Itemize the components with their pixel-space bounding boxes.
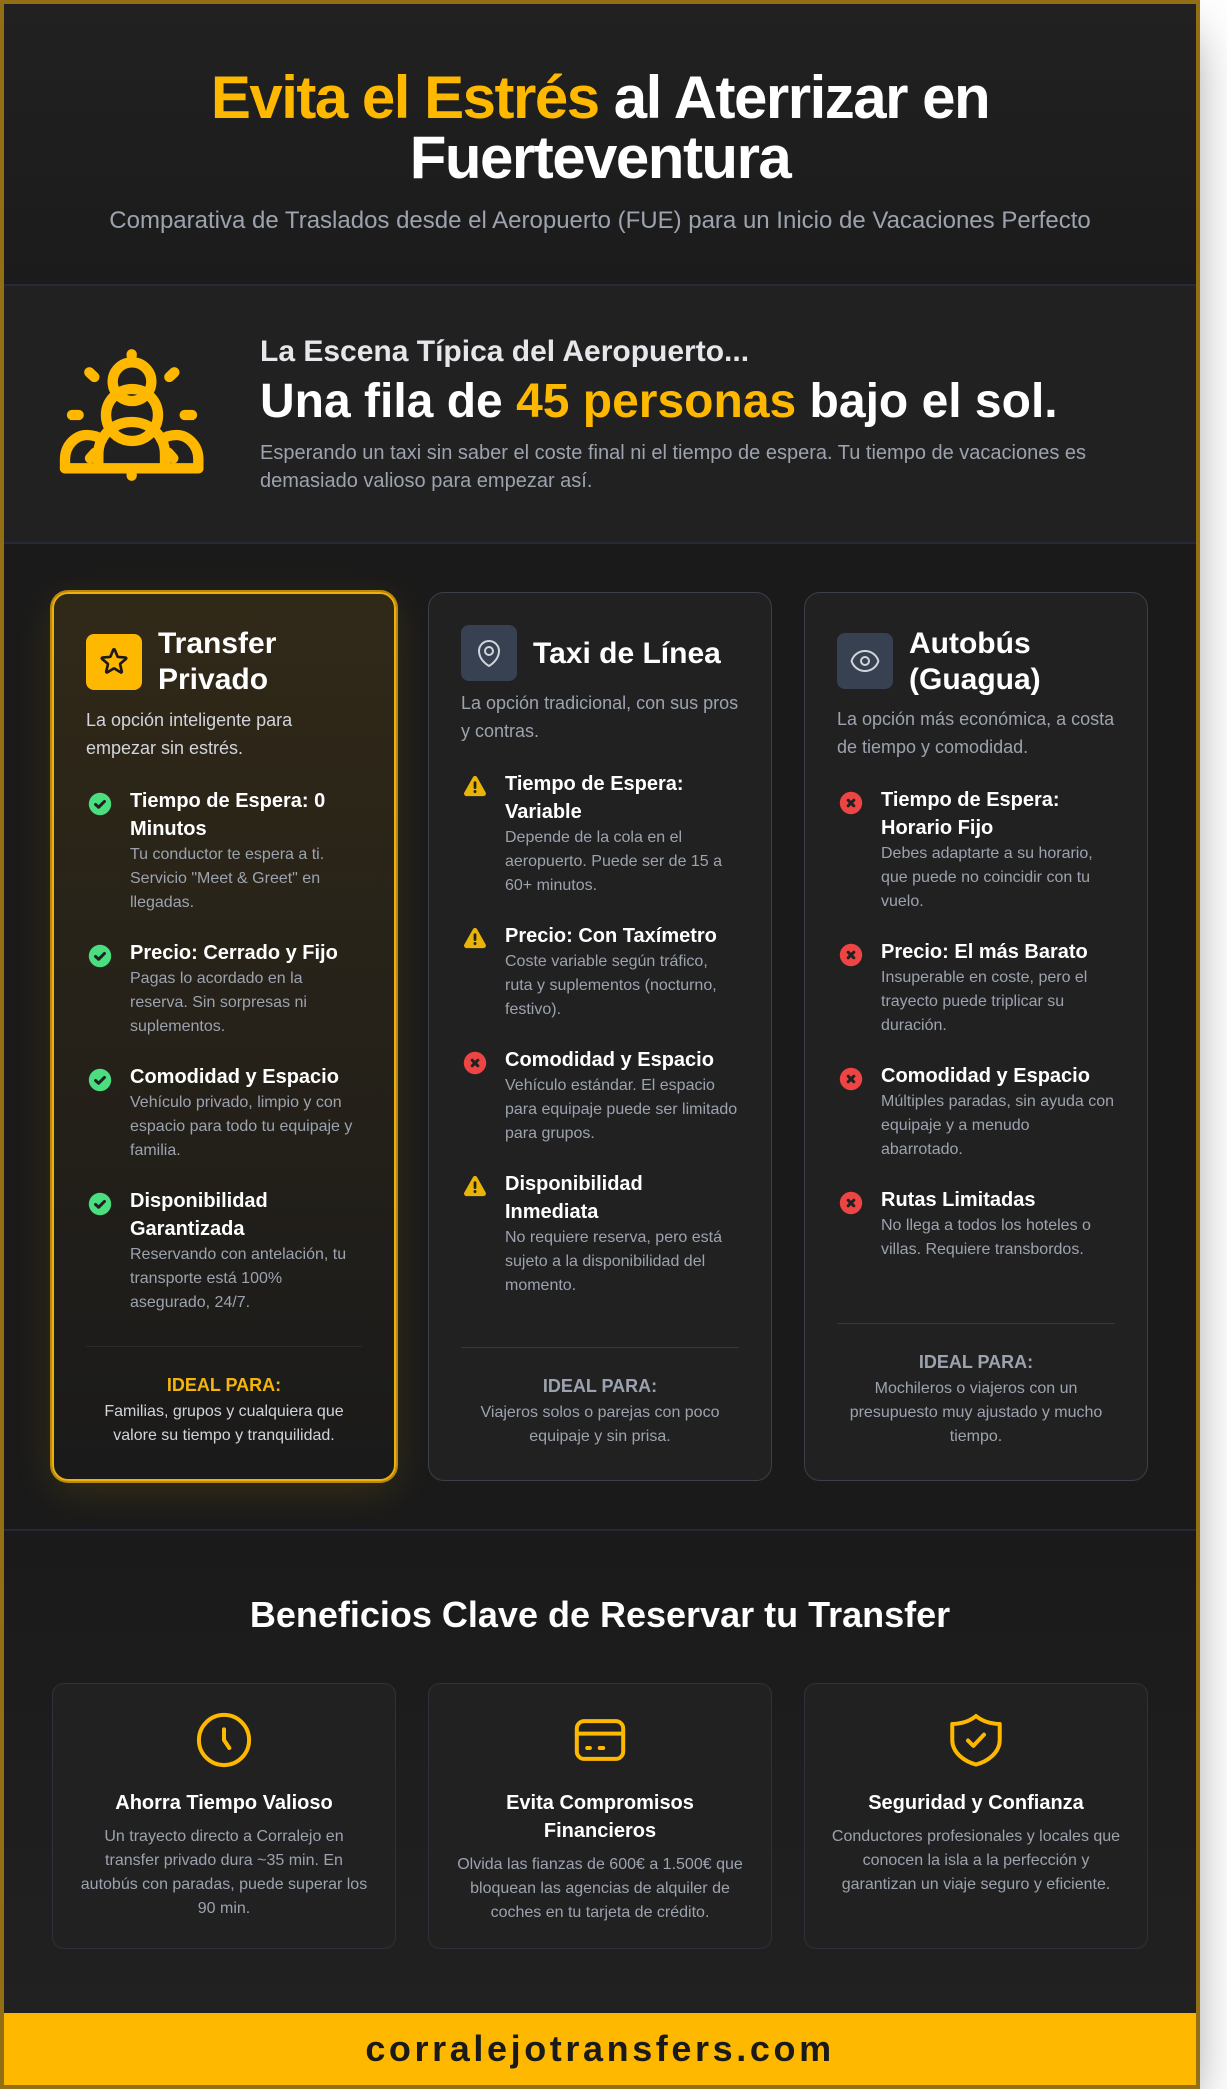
panel: autobús [804, 592, 1148, 1481]
icon: shield check [950, 1714, 1002, 1766]
feature: tiempo de espera [464, 773, 722, 894]
feature: precio [840, 941, 1088, 1034]
benefit: finances [428, 1683, 772, 1949]
card heading: transfer privado: Transfer Privado [158, 627, 276, 696]
feature: comodidad: Múltiples paradas, sin ayuda con equipaje y a menudo abarrotado. [881, 1093, 1114, 1158]
feature: comodidad [464, 1049, 737, 1142]
panel: transfer privado [52, 592, 396, 1481]
feature: tiempo de espera [840, 789, 1093, 910]
benefits heading: Beneficios Clave de Reservar tu Transfer [250, 1594, 950, 1635]
benefit: time [52, 1683, 396, 1949]
ideal para: transfer: IDEAL PARA: [167, 1375, 281, 1395]
feature: comodidad: Vehículo privado, limpio y con espacio para todo tu equipaje y familia. [130, 1094, 352, 1159]
card heading: transfer privado [86, 627, 276, 696]
feature: disponibilidad: Reservando con antelación, tu transporte está 100% asegurado, 24/7. [130, 1246, 346, 1311]
feature: precio: Pagas lo acordado en la reserva. Sin sorpresas ni suplementos. [130, 970, 307, 1035]
benefit: finances: Evita Compromisos Financieros [506, 1792, 694, 1842]
feature: precio [88, 942, 338, 1035]
scene eyebrow: La Escena Típica del Aeropuerto... [260, 335, 749, 368]
ideal para: transfer: Familias, grupos y cualquiera que valore su tiempo y tranquilidad. [104, 1403, 344, 1444]
feature: disponibilidad: Disponibilidad Garantizada [130, 1190, 268, 1240]
feature: comodidad: Vehículo estándar. El espacio para equipaje puede ser limitado para grupos. [505, 1077, 737, 1142]
header [4, 4, 1196, 286]
panel: airport scene [4, 286, 1196, 544]
feature: comodidad [88, 1066, 352, 1159]
benefit: safety [804, 1683, 1148, 1949]
icon: eye [837, 633, 893, 689]
feature: disponibilidad: No requiere reserva, pero está sujeto a la disponibilidad del momento. [505, 1229, 722, 1294]
feature: rutas: Rutas Limitadas [881, 1189, 1035, 1211]
feature: tiempo de espera: Tu conductor te espera a ti. Servicio "Meet & Greet" en llegadas. [130, 846, 324, 911]
feature: tiempo de espera: Tiempo de Espera: Variable [505, 773, 684, 823]
feature: comodidad [840, 1065, 1114, 1158]
feature: rutas [840, 1189, 1091, 1258]
feature: tiempo de espera: Tiempo de Espera: Horario Fijo [881, 789, 1060, 839]
feature: precio: Precio: El más Barato [881, 941, 1088, 963]
ideal para: taxi: IDEAL PARA: [543, 1376, 657, 1396]
benefit: safety: Conductores profesionales y locales que conocen la isla a la perfección y garantizan un viaje seguro y eficiente. [832, 1828, 1120, 1893]
benefit: safety: Seguridad y Confianza [868, 1792, 1084, 1814]
subtitle: Comparativa de Traslados desde el Aeropuerto (FUE) para un Inicio de Vacaciones Perfecto [109, 207, 1091, 234]
footer banner [4, 2013, 1196, 2085]
ideal para: autobús [837, 1323, 1115, 1448]
icon: map pin [461, 625, 517, 681]
feature: precio: Coste variable según tráfico, ruta y suplementos (nocturno, festivo). [505, 953, 717, 1018]
card heading: taxi [461, 625, 721, 681]
benefit: time: Un trayecto directo a Corralejo en transfer privado dura ~35 min. En autobús con paradas, puede superar los 90 min. [81, 1828, 367, 1917]
scene description: Esperando un taxi sin saber el coste final ni el tiempo de espera. Tu tiempo de vacaciones es demasiado valioso para empezar así. [260, 442, 1086, 492]
feature: comodidad: Comodidad y Espacio [505, 1049, 714, 1071]
benefit: time: Ahorra Tiempo Valioso [115, 1792, 333, 1814]
feature: tiempo de espera [88, 790, 325, 911]
feature: tiempo de espera: Depende de la cola en el aeropuerto. Puede ser de 15 a 60+ minutos. [505, 829, 722, 894]
ideal para: autobús: Mochileros o viajeros con un presupuesto muy ajustado y mucho tiempo. [850, 1380, 1102, 1445]
footer banner: corralejotransfers.com [365, 2028, 835, 2069]
card heading: autobús: Autobús (Guagua) [909, 627, 1041, 696]
feature: disponibilidad: Disponibilidad Inmediata [505, 1173, 643, 1223]
card description: La opción inteligente para empezar sin estrés. [86, 710, 292, 758]
feature: rutas: No llega a todos los hoteles o villas. Requiere transbordos. [881, 1217, 1091, 1258]
feature: tiempo de espera: Tiempo de Espera: 0 Minutos [130, 790, 325, 840]
ideal para: taxi: Viajeros solos o parejas con poco equipaje y sin prisa. [481, 1404, 719, 1445]
feature: disponibilidad [88, 1190, 346, 1311]
card heading: autobús [837, 627, 1041, 696]
title: Evita el Estrés al Aterrizar en Fuerteventura [211, 64, 989, 191]
ideal para: taxi [461, 1347, 739, 1448]
card description: La opción tradicional, con sus pros y contras. [461, 693, 738, 741]
panel: benefits [4, 1531, 1196, 2013]
scene headline: Una fila de 45 personas bajo el sol. [260, 375, 1058, 428]
icon: queue of people under the sun [60, 349, 204, 481]
feature: precio: Precio: Cerrado y Fijo [130, 942, 338, 964]
card description: La opción más económica, a costa de tiempo y comodidad. [837, 709, 1114, 757]
benefits grid [52, 1683, 1148, 1949]
card heading: taxi: Taxi de Línea [533, 637, 721, 670]
feature: precio: Precio: Con Taxímetro [505, 925, 717, 947]
feature: comodidad: Comodidad y Espacio [881, 1065, 1090, 1087]
comparison cards [4, 544, 1196, 1531]
icon: clock [196, 1712, 252, 1768]
ideal para: transfer [86, 1346, 362, 1447]
benefit: finances: Olvida las fianzas de 600€ a 1.500€ que bloquean las agencias de alquiler de coches en tu tarjeta de crédito. [457, 1856, 743, 1921]
feature: precio: Insuperable en coste, pero el trayecto puede triplicar su duración. [881, 969, 1087, 1034]
feature: comodidad: Comodidad y Espacio [130, 1066, 339, 1088]
icon: star [86, 634, 142, 690]
panel: taxi de línea [428, 592, 772, 1481]
feature: disponibilidad [464, 1173, 722, 1294]
feature: tiempo de espera: Debes adaptarte a su horario, que puede no coincidir con tu vuelo. [881, 845, 1093, 910]
feature: precio [464, 925, 717, 1018]
icon: credit card [574, 1719, 626, 1761]
ideal para: autobús: IDEAL PARA: [919, 1352, 1033, 1372]
